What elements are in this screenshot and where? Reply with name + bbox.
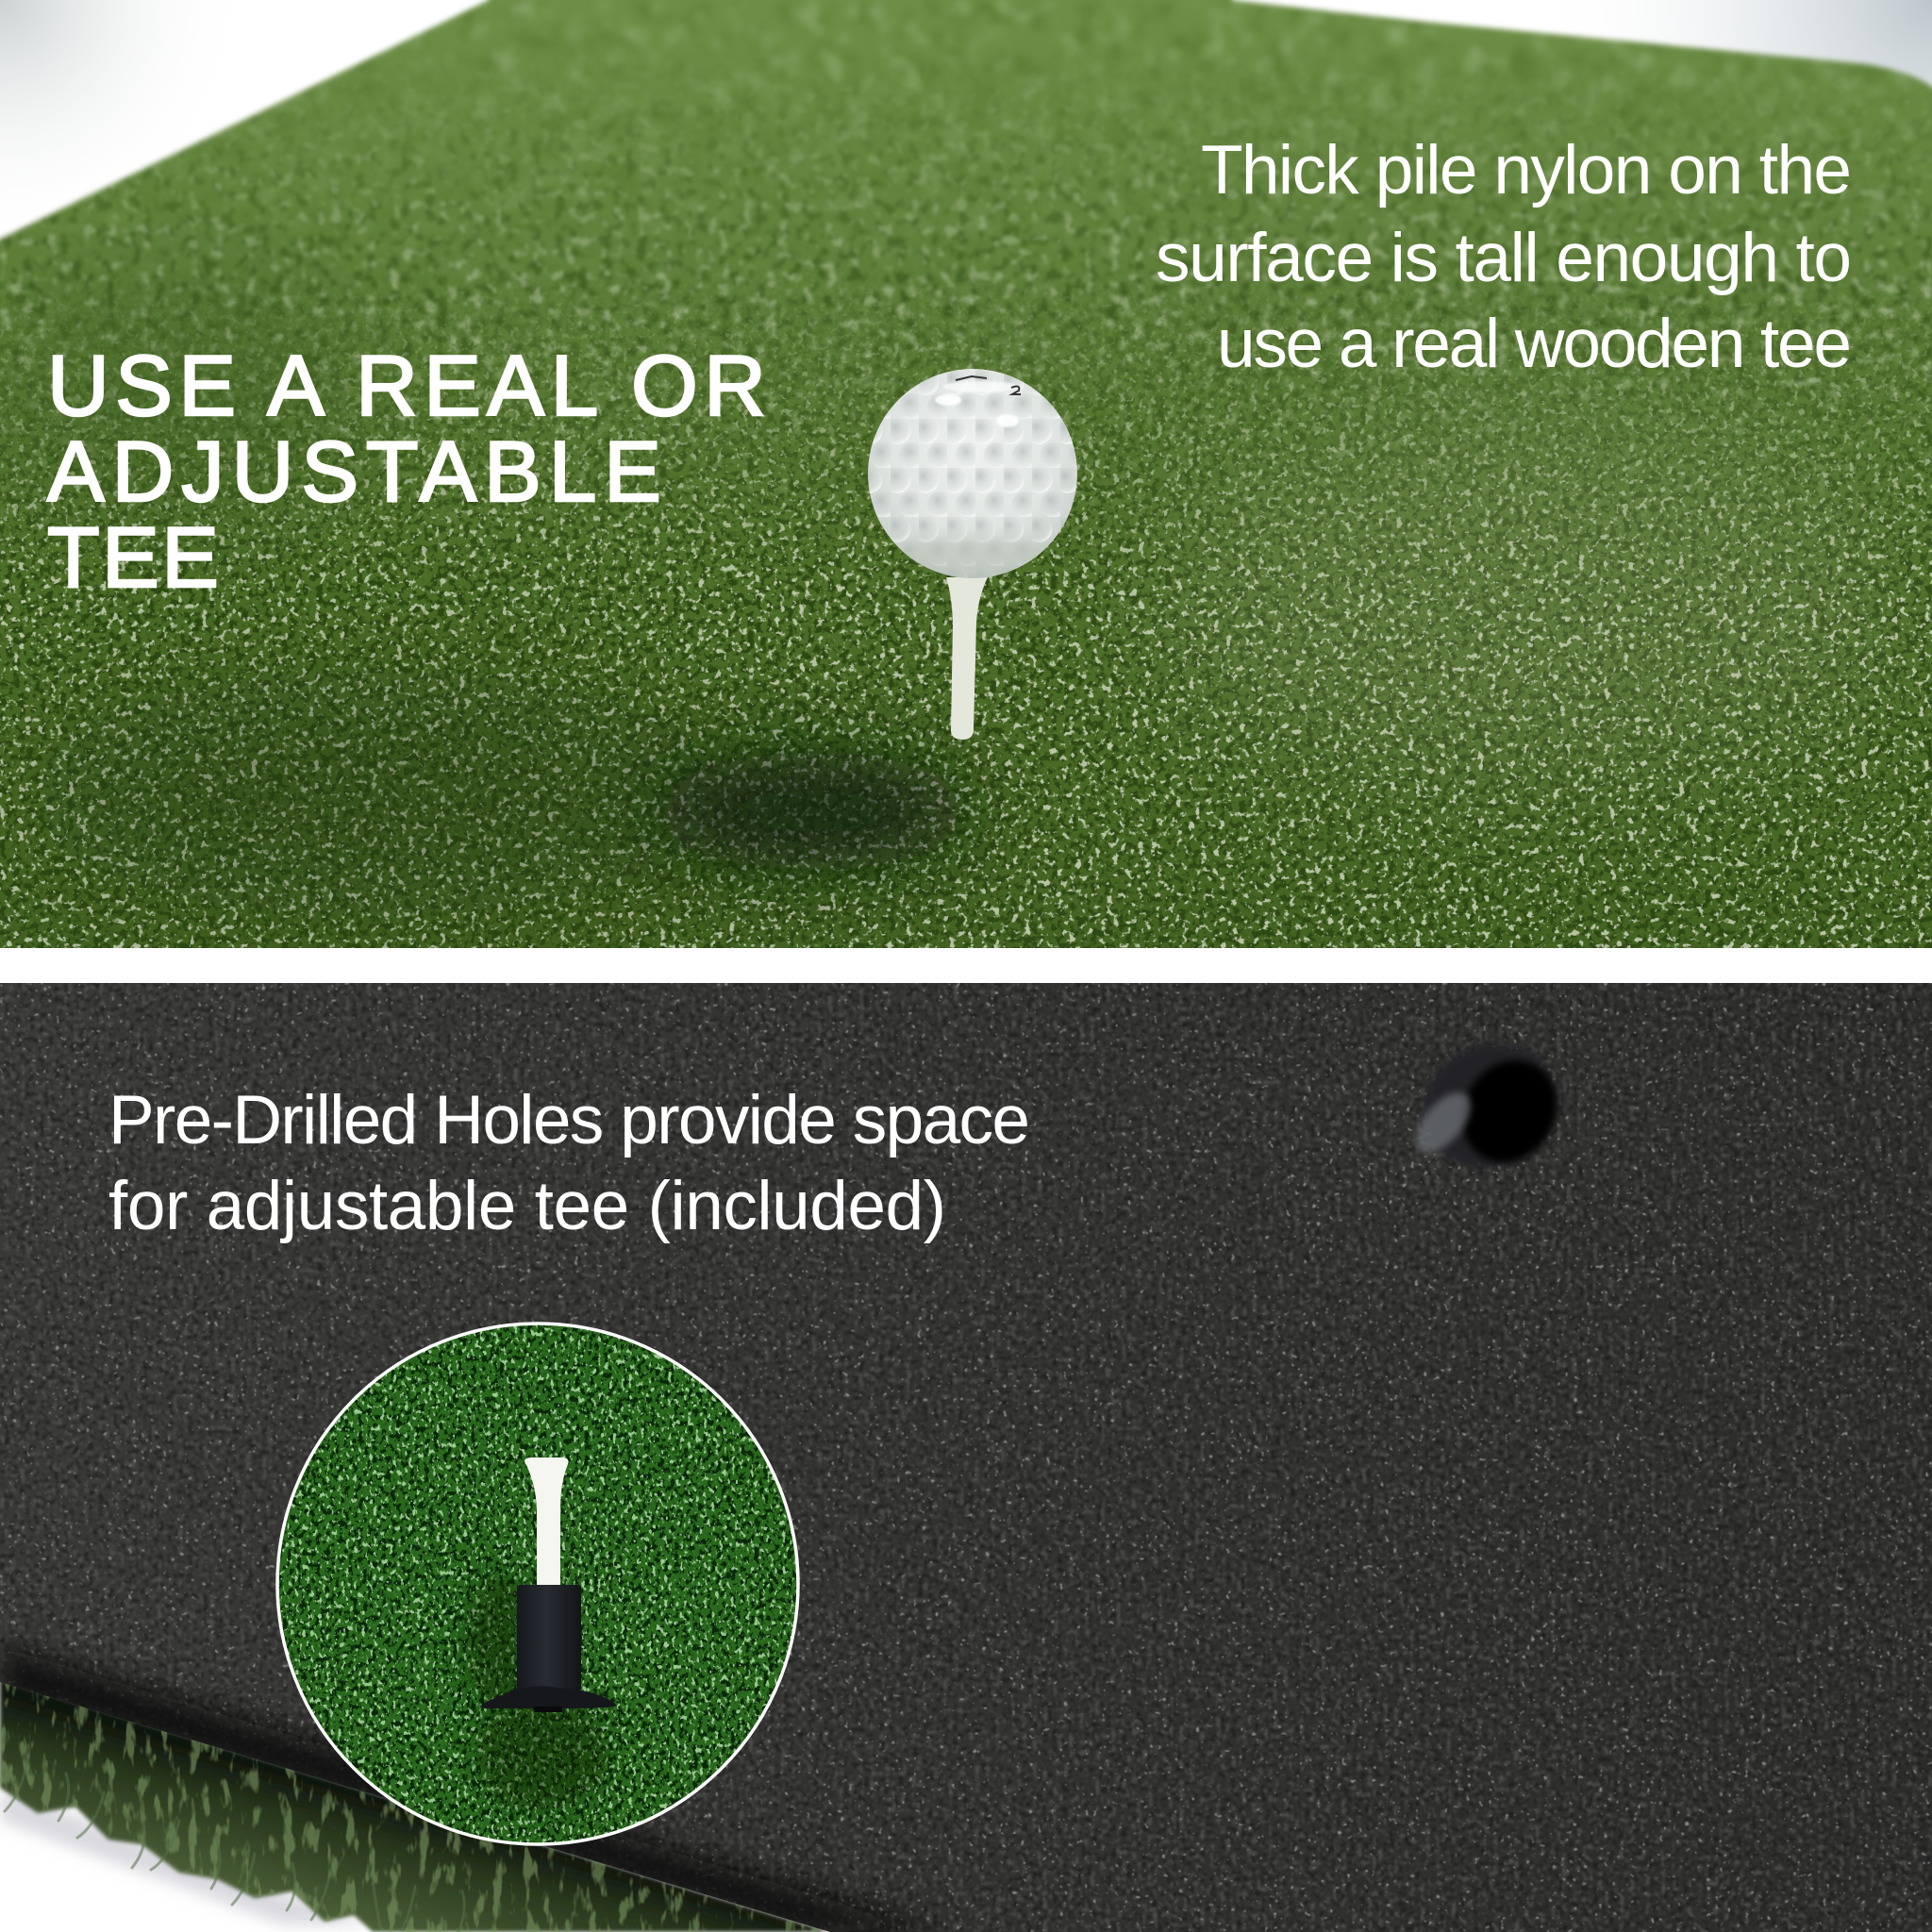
panel: top turf photo — [0, 0, 1932, 948]
heading: use a real or adjustable tee — [47, 339, 766, 606]
heading: use a real or adjustable tee: USE A REAL OR — [47, 339, 766, 434]
text: pre-drilled holes description: Pre-Drilled Holes provide space — [108, 1082, 1030, 1158]
panel: bottom foam backing photo — [0, 983, 1932, 1932]
golf tee — [946, 577, 988, 740]
backdrop: studio white surround — [0, 0, 1932, 147]
white inset ring — [277, 1324, 798, 1844]
foam edge shadow — [0, 1646, 943, 1932]
text: pre-drilled holes description: for adjustable tee (included) — [108, 1168, 946, 1244]
golf ball — [868, 369, 1077, 592]
foam surface — [0, 983, 1932, 1932]
ball brand mark — [956, 376, 987, 380]
text: pre-drilled holes description — [108, 1082, 1030, 1244]
heading: use a real or adjustable tee: ADJUSTABLE — [47, 425, 661, 520]
text: thick pile nylon description: surface is tall enough to — [1156, 220, 1852, 296]
green carpet fringe at lower left — [0, 1679, 830, 1932]
heading: use a real or adjustable tee: TEE — [47, 510, 219, 606]
studio shadow below carpet fringe — [0, 1788, 373, 1924]
text: thick pile nylon description: use a real wooden tee — [1217, 306, 1852, 382]
text: thick pile nylon description: Thick pile nylon on the — [1201, 132, 1852, 208]
black rubber tee holder — [481, 1585, 617, 1712]
pre-drilled hole — [1404, 1023, 1577, 1189]
text: thick pile nylon description — [1156, 132, 1852, 382]
inset: adjustable tee on turf — [274, 1321, 802, 1849]
white tee peg — [525, 1457, 568, 1585]
turf mat surface — [0, 0, 1932, 948]
